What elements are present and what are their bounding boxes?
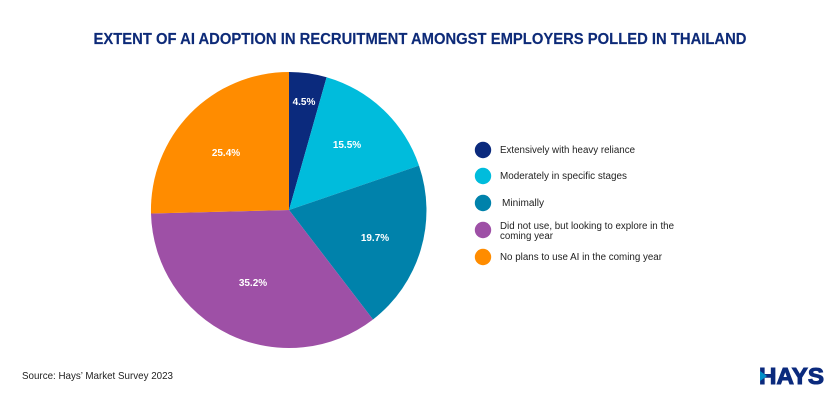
value labels: 4.5% [293,97,316,108]
legend item: moderately: Moderately in specific stages [500,171,627,182]
slice: no plans 25.4% [151,72,289,214]
legend item: minimally: Minimally [502,198,544,209]
legend item: did not use: Did not use, but looking to explore in the [500,221,674,232]
slice: extensively 4.5% [289,72,327,210]
legend item: no plans [475,249,663,265]
legend item: minimally [475,195,544,211]
value labels: 15.5% [333,140,361,151]
logo: Hays: HAYS [759,363,824,389]
legend [475,142,674,265]
value labels [212,97,389,289]
legend item: did not use: coming year [500,231,554,242]
legend item: did not use [475,221,674,242]
legend item: no plans: No plans to use AI in the coming year [500,252,663,263]
legend item: extensively [475,142,635,158]
value labels: 25.4% [212,148,240,159]
title: EXTENT OF AI ADOPTION IN RECRUITMENT AMONGST EMPLOYERS POLLED IN THAILAND [94,31,746,48]
slice: did not use 35.2% [151,210,373,348]
value labels: 19.7% [361,233,389,244]
legend item: moderately [475,168,627,184]
slice: minimally 19.7% [289,166,426,320]
value labels: 35.2% [239,278,267,289]
pie chart [151,72,426,348]
source note: Source: Hays’ Market Survey 2023 [22,370,173,382]
slice: moderately 15.5% [289,77,419,210]
icon: logo arrow [760,371,767,381]
legend item: extensively: Extensively with heavy reliance [500,145,635,156]
